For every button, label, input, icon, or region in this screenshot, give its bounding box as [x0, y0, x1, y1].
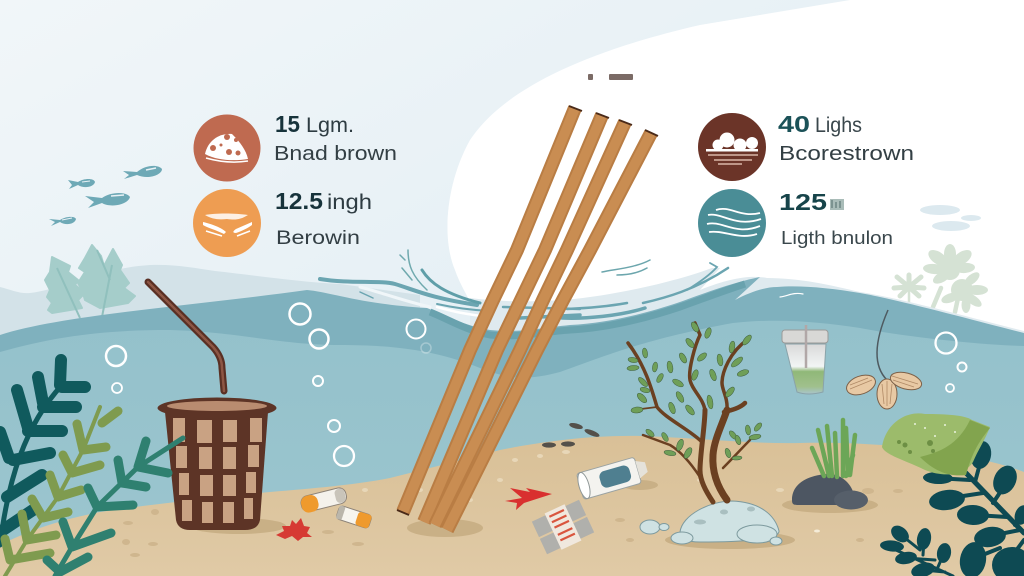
basket cup — [158, 398, 276, 530]
straw 2 — [424, 113, 609, 522]
water back band — [0, 277, 1024, 576]
pale pebbles and stone — [640, 501, 782, 545]
pale hills — [0, 265, 420, 340]
straw 1 — [397, 106, 582, 515]
pale wave crest — [470, 268, 1024, 345]
clear plastic cup — [782, 325, 828, 394]
straw 4 — [447, 130, 658, 530]
value: 12.5 ingh: ingh — [327, 191, 372, 214]
bamboo straws — [397, 106, 658, 530]
sand seabed — [0, 436, 1024, 576]
icon: waves — [698, 189, 766, 257]
icon: trees — [45, 245, 135, 318]
sand speckles — [122, 450, 905, 557]
seaweed: dark corner — [880, 439, 1024, 576]
stat: 15 Lgm — [194, 111, 397, 182]
branching tree — [627, 321, 763, 502]
label: Bnad brown: Bnad brown — [274, 143, 397, 165]
icon: distant palms — [894, 244, 988, 313]
straw 3 — [435, 120, 632, 525]
seaweed: olive — [5, 407, 118, 576]
value: 12.5 ingh — [275, 188, 372, 214]
icon: bent straw — [148, 282, 224, 391]
icon: tiny unit mark — [830, 199, 844, 210]
value: 40 Lighs — [778, 111, 862, 137]
tree trunks — [628, 323, 750, 502]
dark rock — [792, 474, 868, 510]
label: Bcorestrown: Bcorestrown — [779, 143, 914, 165]
icon: clouds — [920, 205, 981, 231]
hanging seed pods — [844, 310, 924, 409]
rolled tube litter — [575, 455, 650, 500]
bundle litter — [531, 498, 595, 556]
value: 15 Lgm.: Lgm. — [306, 114, 354, 137]
icon: orange plate — [193, 189, 261, 257]
capsule litter — [299, 486, 372, 529]
small dark marks at top — [588, 74, 633, 80]
value: 40 Lighs: Lighs — [815, 114, 862, 137]
tree leaves — [627, 321, 763, 460]
value: 15 Lgm.: 15 — [275, 111, 300, 137]
water front layer — [0, 321, 1024, 576]
value: 125: 125 — [779, 189, 827, 215]
black seeds — [542, 422, 600, 448]
red leaf litter — [505, 488, 552, 510]
wave strokes — [320, 250, 803, 318]
value: 15 Lgm. — [275, 111, 354, 137]
icon: fish school — [49, 166, 162, 226]
stat: 40 Lighs — [698, 111, 914, 181]
darker water strip — [430, 284, 745, 336]
icon: rocks on brown — [698, 113, 766, 181]
seaweed: dark teal — [0, 360, 85, 545]
seaweed: green teal — [47, 438, 183, 576]
icon: small tan shadows — [190, 480, 878, 549]
red coral litter — [276, 518, 312, 541]
label: Berowin: Berowin — [276, 228, 360, 249]
value: 40 Lighs: 40 — [778, 111, 810, 137]
value: 12.5 ingh: 12.5 — [275, 188, 323, 214]
stat: 12.5 ingh — [193, 188, 372, 257]
icon: pizza — [194, 114, 260, 182]
label: Ligth bnulon: Ligth bnulon — [781, 228, 893, 248]
green moss clump — [882, 413, 990, 475]
stat: 125 — [698, 189, 893, 257]
white glow shape — [447, 0, 1024, 345]
sea grass — [812, 420, 855, 477]
air bubbles — [106, 304, 966, 466]
